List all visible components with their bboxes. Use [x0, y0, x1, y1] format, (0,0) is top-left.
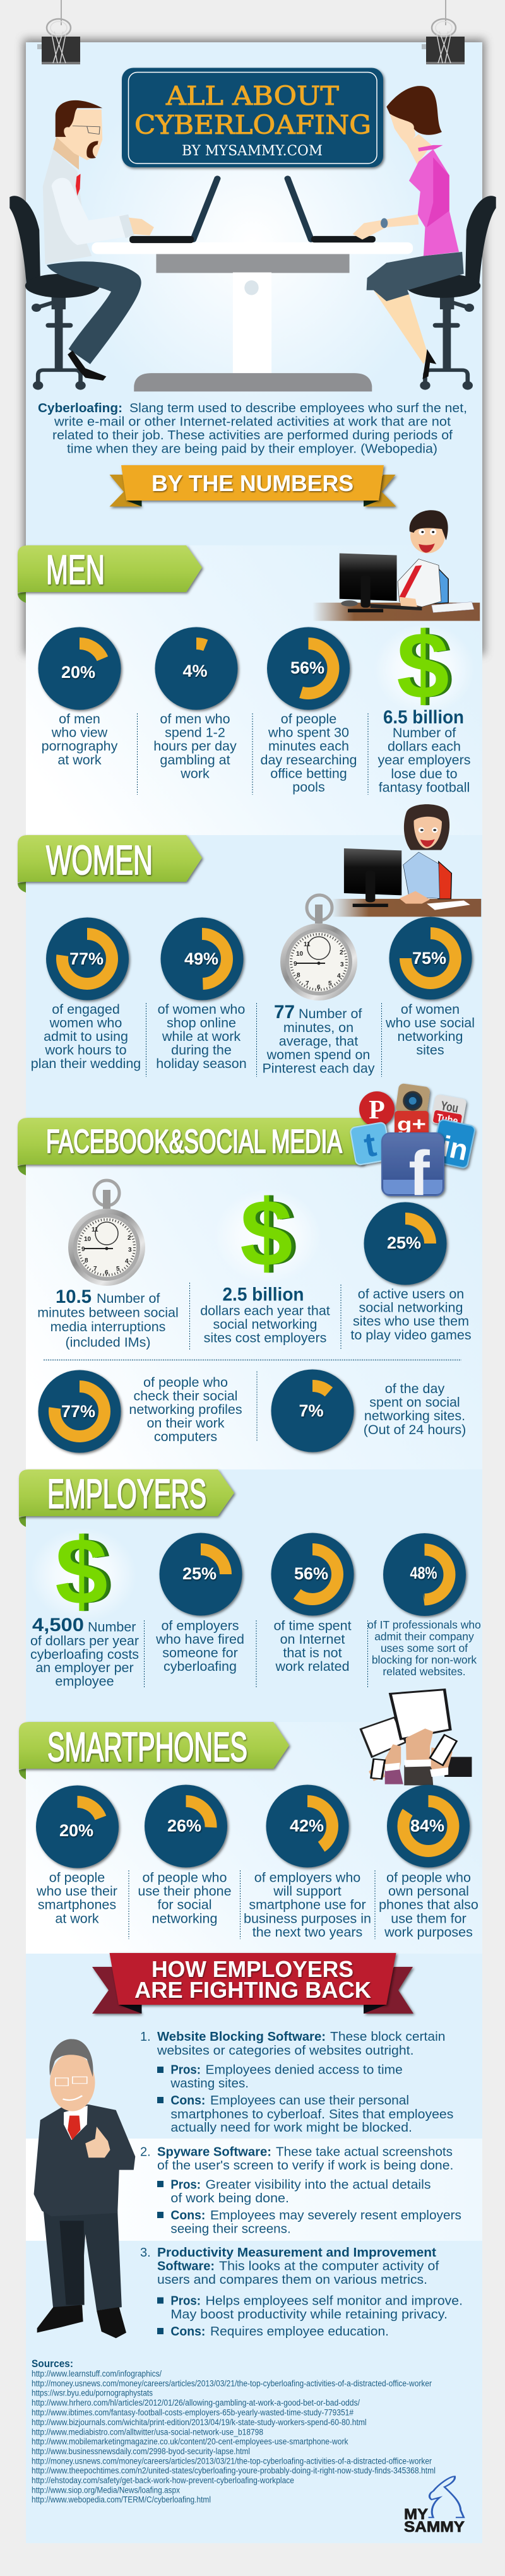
item 2: spyware software: Spyware Software:: [157, 2145, 271, 2159]
item 1: website blocking software: wasting sites.: [170, 2077, 249, 2091]
stat: 2.5 billion with dollar icon: [200, 1180, 330, 1346]
icon: twitter: [350, 1122, 391, 1166]
stat: 10.5 minutes with stopwatch: 8: [85, 1257, 88, 1264]
item 2: spyware software: Employees may severely resent employers: [210, 2209, 461, 2223]
stat: 4% of men: gambling at: [160, 752, 230, 768]
stat: 20% of people: who use their: [36, 1884, 117, 1899]
intro definition text: Cyberloafing:: [38, 401, 122, 415]
stat: 2.5 billion with dollar icon: $: [244, 1180, 297, 1286]
banner: men: [18, 545, 202, 603]
stat: 26% of people: of people who: [143, 1870, 227, 1885]
left office chair: [9, 196, 100, 390]
hero illustration: man and woman at desk: [9, 86, 496, 391]
item 2: spyware software: Pros:: [170, 2178, 201, 2192]
laptops: [129, 179, 376, 243]
stat: 48% of IT professionals: admit their company: [374, 1630, 474, 1642]
stat: 10.5 minutes with stopwatch: 11: [92, 1226, 98, 1233]
item 2: spyware software: of the user's screen to verify if work is being done.: [157, 2159, 453, 2173]
item 1: website blocking software: Pros:: [170, 2063, 201, 2077]
icon: facebook: f: [408, 1138, 430, 1209]
stat: 26% of people: 26%: [167, 1817, 201, 1836]
stat: 56% of people: office betting: [270, 766, 347, 781]
stat: 56% of people: minutes each: [268, 739, 349, 754]
stat: 77% check social profiles: 77%: [61, 1402, 95, 1421]
stat: 49% of women: of women who: [158, 1002, 245, 1017]
stat: 25% of employers: someone for: [162, 1645, 238, 1660]
stat: 4,500 dollars with dollar icon: 4,500: [32, 1615, 84, 1635]
stat: 77 minutes on Pinterest with stopwatch: 10: [296, 951, 304, 958]
stat: 7% of the day: [271, 1370, 466, 1452]
item 1: website blocking software: 1.: [140, 2030, 151, 2044]
stat: 42% of employers: [244, 1785, 371, 1940]
stat: 6.5 billion with dollar icon: $: [400, 612, 453, 718]
stat: 7% of the day: spent on social: [369, 1395, 460, 1410]
item 3: productivity measurement software: users and compares them on various metrics.: [157, 2273, 427, 2287]
stat: 26% of people: for social: [157, 1897, 212, 1913]
stat: 56% of people: who spent 30: [268, 725, 349, 740]
logo: MySammy: MY: [404, 2506, 428, 2523]
stat: 77% of engaged women: plan their wedding: [31, 1056, 141, 1071]
stat: 20% of men: who view: [51, 725, 108, 740]
icon: linkedin: [431, 1119, 475, 1168]
sources list: http://www.businessnewsdaily.com/2998-byod-security-lapse.html: [32, 2447, 250, 2456]
sources list: http://www.hrhero.com/hl/articles/2012/01/26/allowing-gambling-at-work-a-good-bet-or-bad-odds/: [32, 2398, 360, 2407]
sources list: http://www.webopedia.com/TERM/C/cyberloafing.html: [32, 2495, 211, 2505]
stat: 56% of people: [261, 627, 357, 795]
stat: 4% of men: 4%: [182, 662, 208, 680]
stat: 48% of IT professionals: related websites.: [383, 1665, 466, 1678]
banner: employers: [19, 1469, 234, 1527]
icon: facebook: [382, 1133, 444, 1209]
stat: 77% check social profiles: [38, 1370, 242, 1453]
stat: 4,500 dollars with dollar icon: $: [55, 1518, 108, 1624]
stat: 75% of women: networking: [398, 1029, 463, 1044]
stat: 77% of engaged women: women who: [49, 1015, 122, 1030]
icon: google plus: g+: [397, 1114, 426, 1135]
stat: 25% of employers: cyberloafing: [163, 1659, 237, 1674]
item 3: productivity measurement software: Requires employee education.: [210, 2325, 389, 2339]
stat: 84% of people: work purposes: [384, 1925, 473, 1940]
stat: 77% check social profiles: networking profiles: [129, 1402, 242, 1417]
stat: 20% of people: 20%: [59, 1821, 93, 1840]
sources list: http://www.ibtimes.com/fantasy-football-costs-employers-65b-yearly-wasted-time-study-779351#: [32, 2408, 354, 2418]
stat: 6.5 billion with dollar icon: dollars each: [388, 739, 461, 754]
icon: twitter: t: [361, 1125, 379, 1165]
stat: 84% of people: own personal: [388, 1884, 469, 1899]
sources list: http://www.theepochtimes.com/n2/united-states/cyberloafing-youre-probably-doing-it-right-now-study-finds-345368.html: [32, 2466, 436, 2476]
stat: 6.5 billion with dollar icon: [374, 612, 475, 795]
item 3: productivity measurement software: 3.: [140, 2246, 151, 2260]
logo: MySammy: [404, 2476, 465, 2536]
stat: 10.5 minutes with stopwatch: 9: [81, 1246, 85, 1253]
stat: 77 minutes on Pinterest with stopwatch: 6: [317, 984, 321, 991]
stat: 10.5 minutes with stopwatch: 3: [128, 1247, 132, 1254]
stat: 20% of men: 20%: [61, 663, 95, 682]
sources list: http://www.mediabistro.com/alltwitter/usa-social-network-use_b18798: [32, 2427, 263, 2437]
banner: smartphones: [19, 1722, 289, 1779]
stat: 25% of active users: 25%: [387, 1233, 421, 1252]
icon: google plus: [395, 1111, 429, 1136]
paper shadow: [23, 39, 485, 655]
stat: 56% of time: on Internet: [280, 1632, 345, 1647]
stat: 4% of men: [153, 627, 237, 781]
stat: 42% of employers: will support: [273, 1884, 342, 1899]
illustration: woman at computer: [332, 804, 481, 917]
stat: 56% of time: work related: [275, 1659, 350, 1674]
stat: 25% of employers: of employers: [161, 1618, 239, 1634]
stat: 20% of people: of people: [49, 1870, 105, 1885]
icon: linkedin: in: [439, 1129, 471, 1166]
stat: 77 minutes on Pinterest with stopwatch: minutes, on: [283, 1020, 354, 1035]
stat: 4,500 dollars with dollar icon: Number: [88, 1620, 136, 1635]
stat: 25% of active users: [350, 1202, 472, 1343]
stat: 25% of employers: who have fired: [155, 1632, 244, 1647]
item 2: spyware software: [140, 2145, 461, 2236]
item 3: productivity measurement software: Pros:: [170, 2294, 201, 2308]
icons: social media cluster: [350, 1083, 475, 1209]
stat: 77% check social profiles: on their work: [146, 1415, 225, 1430]
stat: 48% of IT professionals: of IT professionals who: [367, 1618, 481, 1631]
stat: 2.5 billion with dollar icon: $: [240, 1180, 293, 1286]
stat: 4% of men: hours per day: [153, 739, 237, 754]
stat: 77% of engaged women: admit to using: [44, 1029, 128, 1044]
stat: 4,500 dollars with dollar icon: [30, 1518, 139, 1689]
man character: [43, 100, 154, 381]
stat: 84% of people: of people who: [386, 1870, 471, 1885]
stat: 10.5 minutes with stopwatch: [37, 1180, 179, 1350]
stat: 10.5 minutes with stopwatch: media interruptions: [50, 1319, 165, 1334]
stat: 20% of men: pornography: [42, 739, 118, 754]
stat: 25% of active users: to play video games: [350, 1327, 472, 1343]
ribbon: how employers are fighting back: HOW EMPLOYERS: [152, 1956, 354, 1982]
stat: 4,500 dollars with dollar icon: $: [57, 1518, 110, 1624]
banner: facebook and social media: [18, 1118, 379, 1175]
woman character: [353, 86, 464, 379]
stat: 42% of employers: the next two years: [252, 1925, 362, 1940]
stat: 4% of men: of men who: [160, 711, 230, 727]
stat: 4,500 dollars with dollar icon: $: [59, 1518, 112, 1624]
stat: 10.5 minutes with stopwatch: 2: [128, 1235, 131, 1242]
logo: MySammy: SAMMY: [404, 2519, 465, 2536]
ribbon: how employers are fighting back: [92, 1953, 413, 2014]
stat: 7% of the day: (Out of 24 hours): [364, 1422, 466, 1437]
stat: 77 minutes on Pinterest with stopwatch: 9: [294, 961, 297, 968]
item 1: website blocking software: These block certain: [330, 2030, 446, 2044]
stat: 56% of time: that is not: [283, 1645, 342, 1660]
stat: 10.5 minutes with stopwatch: 10.5: [56, 1286, 92, 1307]
stat: 20% of men: at work: [57, 752, 102, 768]
sources list: http://www.mobilemarketingmagazine.co.uk/content/20-cent-employees-use-smartphone-work: [32, 2437, 348, 2447]
desk: [92, 242, 413, 391]
stat: 77 minutes on Pinterest with stopwatch: 2: [340, 949, 343, 956]
stat: 56% of time: 56%: [294, 1564, 328, 1583]
stat: 77 minutes on Pinterest with stopwatch: Number of: [299, 1006, 362, 1021]
stat: 48% of IT professionals: [367, 1533, 481, 1678]
sources list: [32, 2358, 436, 2505]
icon: left binder clip: [37, 0, 80, 64]
stat: 42% of employers: business purposes in: [244, 1911, 371, 1926]
item 2: spyware software: of work being done.: [170, 2192, 289, 2205]
stat: 26% of people: networking: [152, 1911, 217, 1926]
stat: 84% of people: use them for: [391, 1911, 466, 1926]
stat: 7% of the day: of the day: [385, 1381, 444, 1396]
stat: 6.5 billion with dollar icon: lose due to: [391, 766, 458, 781]
stat: 77% check social profiles: computers: [154, 1429, 217, 1444]
sources list: http://money.usnews.com/money/careers/articles/2013/03/21/the-top-cyberloafing-activities-of-a-distracted-office-worker: [32, 2378, 432, 2388]
stat: 77 minutes on Pinterest with stopwatch: 4: [337, 973, 341, 980]
intro definition text: related to their job. These activities are performed during periods of: [52, 429, 453, 442]
icon: pinterest: [359, 1091, 395, 1127]
stat: 25% of employers: [155, 1533, 244, 1674]
banner: smartphones: SMARTPHONES: [47, 1724, 247, 1770]
item 3: productivity measurement software: [140, 2246, 463, 2339]
stat: 2.5 billion with dollar icon: sites cost employers: [204, 1331, 326, 1346]
stat: 6.5 billion with dollar icon: 6.5 billion: [383, 707, 464, 728]
stat: 56% of time: of time spent: [273, 1618, 352, 1634]
stat: 10.5 minutes with stopwatch: 10: [84, 1236, 92, 1243]
item 3: productivity measurement software: This looks at the computer activity of: [219, 2260, 439, 2274]
item 1: website blocking software: Cons:: [170, 2094, 205, 2108]
stat: 49% of women: [156, 918, 247, 1071]
item 2: spyware software: 2.: [140, 2145, 151, 2159]
item 1: website blocking software: Website Blocking Software:: [157, 2030, 326, 2044]
icon: youtube: [431, 1094, 467, 1128]
stat: 77 minutes on Pinterest with stopwatch: women spend on: [266, 1047, 370, 1062]
stat: 56% of people: 56%: [290, 658, 324, 677]
stat: 77% of engaged women: work hours to: [44, 1043, 127, 1058]
item 3: productivity measurement software: Software:: [157, 2260, 215, 2274]
stat: 56% of time: [271, 1533, 354, 1674]
stat: 4% of men: spend 1-2: [165, 725, 225, 740]
stat: 25% of active users: social networking: [359, 1300, 463, 1315]
sources list: http://money.usnews.com/money/careers/articles/2013/03/21/the-top-cyberloafing-activities-of-a-distracted-office-worker: [32, 2456, 432, 2466]
stat: 7% of the day: 7%: [299, 1401, 324, 1420]
item 3: productivity measurement software: May boost productivity while retaining privacy.: [170, 2308, 448, 2322]
ribbon: how employers are fighting back: ARE FIGHTING BACK: [134, 1977, 371, 2003]
sources list: http://www.siop.org/Media/News/loafing.aspx: [32, 2485, 180, 2495]
stat: 56% of people: of people: [281, 711, 336, 727]
stat: 49% of women: while at work: [162, 1029, 241, 1044]
stat: 26% of people: [138, 1785, 232, 1926]
sources list: http://www.bizjournals.com/wichita/print-edition/2013/04/19/k-state-study-workers-spend-60-80.html: [32, 2418, 367, 2427]
stat: 77 minutes on Pinterest with stopwatch: [262, 895, 375, 1076]
intro definition text: time when they are being paid by their employer. (Webopedia): [67, 442, 437, 456]
stat: 75% of women: [385, 917, 475, 1058]
item 2: spyware software: Greater visibility into the actual details: [206, 2178, 431, 2192]
illustration: hands holding devices: [360, 1690, 472, 1785]
stat: 10.5 minutes with stopwatch: 5: [116, 1266, 120, 1273]
stat: 75% of women: 75%: [412, 949, 446, 968]
icon: youtube: You: [439, 1099, 460, 1116]
stat: 77% check social profiles: of people who: [143, 1375, 228, 1390]
sources list: http://ehstoday.com/safety/get-back-work-how-prevent-cyberloafing-workplace: [32, 2476, 294, 2485]
stat: 77 minutes on Pinterest with stopwatch: Pinterest each day: [262, 1060, 375, 1076]
stat: 2.5 billion with dollar icon: 2.5 billion: [222, 1284, 304, 1305]
banner: employers: EMPLOYERS: [47, 1471, 206, 1517]
ribbon: by the numbers: [110, 465, 396, 506]
stat: 6.5 billion with dollar icon: Number of: [393, 725, 456, 740]
stat: 49% of women: 49%: [184, 949, 218, 968]
ribbon: by the numbers: BY THE NUMBERS: [152, 470, 354, 496]
stat: 48% of IT professionals: uses some sort of: [381, 1642, 468, 1654]
stat: 10.5 minutes with stopwatch: minutes between social: [37, 1305, 179, 1321]
stat: 2.5 billion with dollar icon: dollars each year that: [200, 1303, 330, 1318]
icon: right binder clip: [422, 0, 465, 64]
stat: 48% of IT professionals: blocking for non-work: [372, 1654, 477, 1666]
stat: 6.5 billion with dollar icon: $: [396, 612, 449, 718]
item 1: website blocking software: websites or categories of websites outright.: [157, 2044, 414, 2058]
stat: 20% of people: [36, 1785, 119, 1926]
stat: 77% of engaged women: [31, 918, 141, 1071]
sources list: http://www.learnstuff.com/infographics/: [32, 2369, 162, 2378]
stat: 25% of active users: sites who use them: [353, 1314, 469, 1329]
item 1: website blocking software: actually need for work might be blocked.: [170, 2121, 412, 2135]
stat: 77% of engaged women: 77%: [69, 949, 104, 968]
intro definition text: [38, 401, 467, 456]
stat: 56% of people: pools: [292, 780, 325, 795]
stat: 77% check social profiles: check their social: [134, 1389, 237, 1404]
stat: 6.5 billion with dollar icon: fantasy football: [379, 780, 470, 795]
stat: 4,500 dollars with dollar icon: of dollars per year: [30, 1634, 139, 1649]
illustration: businessman with thumbs up: [34, 2039, 135, 2338]
stat: 77 minutes on Pinterest with stopwatch: 7: [306, 980, 309, 987]
stat: 20% of people: at work: [55, 1911, 99, 1926]
right office chair: [406, 196, 496, 390]
title panel: [122, 68, 383, 167]
stat: 77 minutes on Pinterest with stopwatch: average, that: [279, 1034, 358, 1049]
stat: 77 minutes on Pinterest with stopwatch: 8: [297, 972, 300, 979]
icon: pinterest: P: [369, 1096, 385, 1125]
item 1: website blocking software: Employees denied access to time: [206, 2063, 403, 2077]
stat: 10.5 minutes with stopwatch: (included IMs): [65, 1334, 151, 1350]
banner: facebook and social media: FACEBOOK&SOCIAL MEDIA: [46, 1124, 342, 1160]
stat: 56% of people: day researching: [261, 752, 357, 768]
item 1: website blocking software: smartphones to cyberloaf. Sites that employees: [170, 2108, 453, 2122]
stat: 77% of engaged women: of engaged: [52, 1002, 120, 1017]
fighting back list: [140, 2030, 463, 2339]
item 2: spyware software: Cons:: [170, 2209, 205, 2223]
stat: 10.5 minutes with stopwatch: Number of: [97, 1291, 160, 1306]
stat: 77 minutes on Pinterest with stopwatch: 5: [328, 980, 332, 987]
item 1: website blocking software: [140, 2030, 453, 2135]
stat: 10.5 minutes with stopwatch: 6: [105, 1269, 109, 1276]
title panel: CYBERLOAFING: [134, 110, 371, 140]
sources list: Sources:: [32, 2358, 73, 2370]
banner: women: [18, 835, 202, 893]
stat: 4,500 dollars with dollar icon: employee: [55, 1673, 114, 1689]
stat: 6.5 billion with dollar icon: year employers: [378, 752, 470, 768]
banner: men: MEN: [46, 547, 105, 593]
item 2: spyware software: These take actual screenshots: [276, 2145, 453, 2159]
stat: 4% of men: work: [180, 766, 210, 781]
stat: 25% of active users: of active users on: [358, 1286, 464, 1302]
stat: 20% of people: smartphones: [38, 1897, 116, 1913]
stat: 49% of women: during the: [171, 1043, 232, 1058]
stat: 26% of people: use their phone: [138, 1884, 232, 1899]
item 3: productivity measurement software: Cons:: [170, 2325, 205, 2339]
stat: 42% of employers: smartphone use for: [249, 1897, 366, 1913]
title panel: BY MYSAMMY.COM: [182, 143, 323, 159]
item 1: website blocking software: Employees can use their personal: [210, 2094, 409, 2108]
stat: 2.5 billion with dollar icon: $: [242, 1180, 295, 1286]
stat: 25% of employers: 25%: [182, 1564, 217, 1583]
sources list: https://wsr.byu.edu/pornographystats: [32, 2389, 153, 2398]
stat: 10.5 minutes with stopwatch: 7: [93, 1266, 97, 1273]
stat: 2.5 billion with dollar icon: social networking: [213, 1317, 317, 1332]
stat: 20% of men: [38, 627, 121, 768]
intro definition text: Slang term used to describe employees who surf the net,: [129, 401, 467, 415]
stat: 75% of women: sites: [416, 1043, 444, 1058]
stat: 77 minutes on Pinterest with stopwatch: 3: [340, 961, 344, 968]
icon: instagram: [395, 1083, 431, 1116]
stat: 84% of people: phones that also: [379, 1897, 478, 1913]
stat: 10.5 minutes with stopwatch: 4: [125, 1258, 129, 1265]
stat: 84% of people: [379, 1785, 478, 1940]
title panel: ALL ABOUT: [165, 81, 339, 111]
stat: 7% of the day: networking sites.: [364, 1408, 465, 1423]
stat: 75% of women: who use social: [385, 1015, 475, 1030]
stat: 48% of IT professionals: 48%: [410, 1564, 437, 1582]
stat: 49% of women: holiday season: [156, 1056, 247, 1071]
item 3: productivity measurement software: Productivity Measurement and Improvement: [157, 2246, 436, 2260]
stat: 6.5 billion with dollar icon: $: [399, 612, 452, 718]
icon: youtube: Tube: [436, 1112, 459, 1127]
stat: 77 minutes on Pinterest with stopwatch: 77: [274, 1002, 295, 1023]
stat: 77 minutes on Pinterest with stopwatch: 11: [304, 941, 311, 948]
intro definition text: write e-mail or other Internet-related activities at work that are not: [54, 415, 451, 429]
stat: 75% of women: of women: [401, 1002, 460, 1017]
stat: 42% of employers: of employers who: [254, 1870, 360, 1885]
item 2: spyware software: seeing their screens.: [170, 2222, 291, 2236]
item 3: productivity measurement software: Helps employees self monitor and improve.: [206, 2294, 463, 2308]
stat: 4,500 dollars with dollar icon: an employer per: [35, 1660, 134, 1675]
banner: women: WOMEN: [46, 837, 153, 883]
stat: 49% of women: shop online: [167, 1015, 236, 1030]
stat: 20% of men: of men: [59, 711, 100, 727]
stat: 42% of employers: 42%: [290, 1817, 324, 1836]
stat: 84% of people: 84%: [410, 1817, 444, 1836]
illustration: man at computer: [312, 510, 480, 621]
stat: 4,500 dollars with dollar icon: cyberloafing costs: [30, 1647, 139, 1662]
